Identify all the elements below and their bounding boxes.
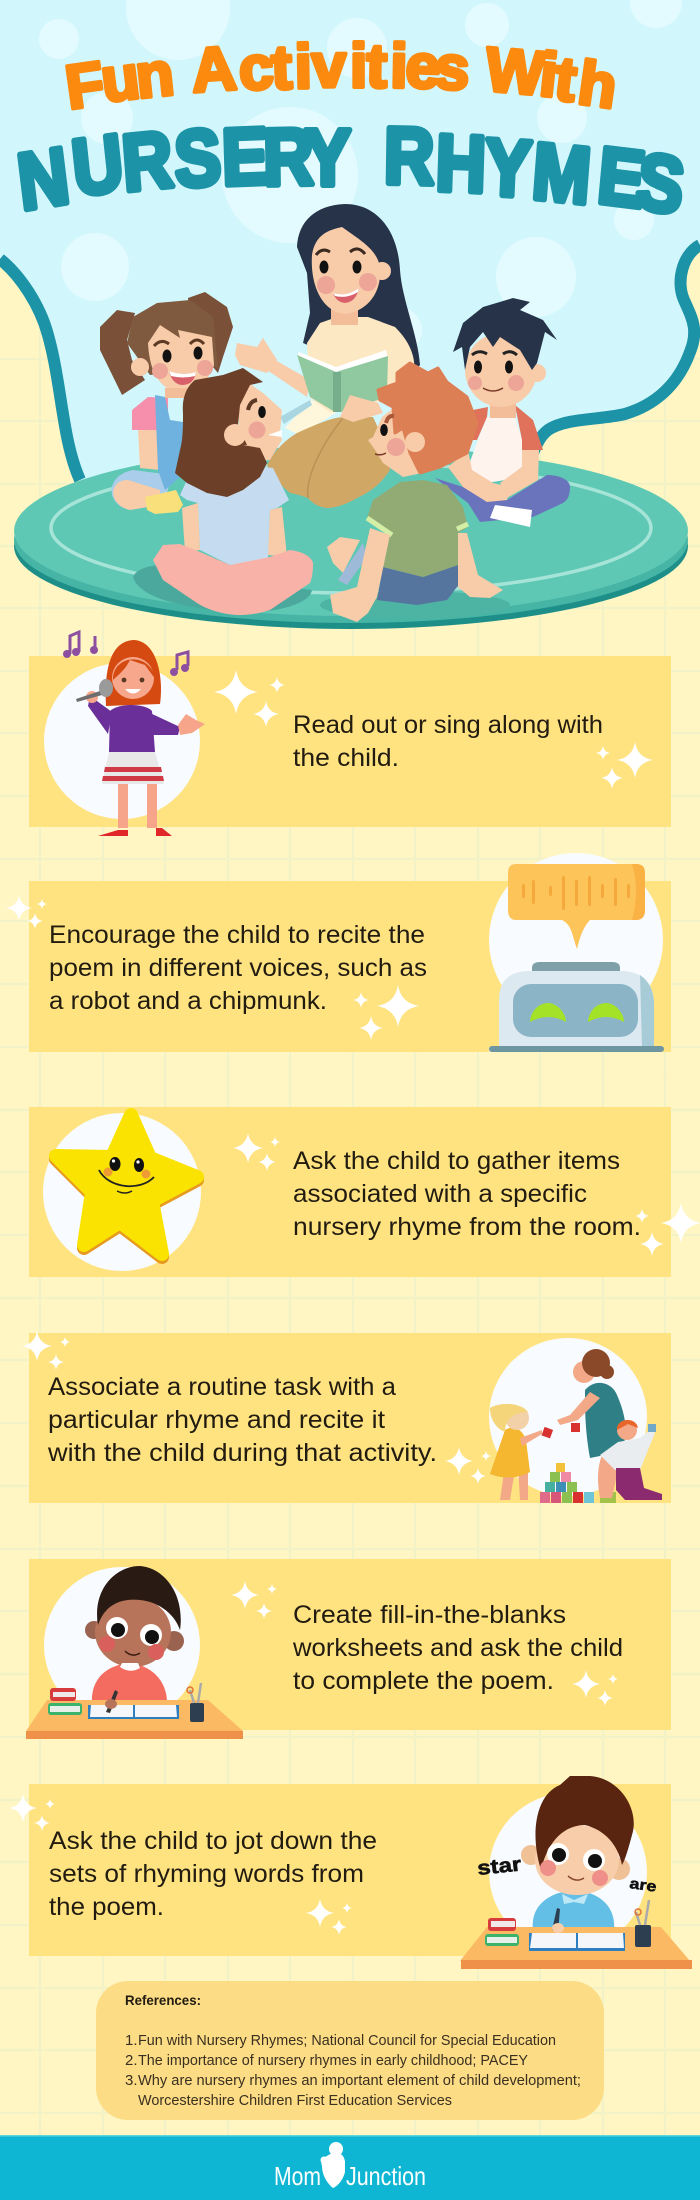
icon: smiling star: [56, 1115, 197, 1257]
icon: boy writing rhyming words at desk: [460, 1776, 692, 1969]
text: Read out or sing along with: [293, 711, 603, 739]
sparkles: [214, 670, 653, 789]
word: are: are: [628, 1875, 658, 1896]
sparkles: [231, 1581, 618, 1706]
panel 4: routine task: [22, 1331, 671, 1503]
panel 1: read or sing along: [29, 632, 671, 836]
sparkles: [233, 1133, 700, 1256]
text: with the child during that activity.: [47, 1439, 437, 1467]
panel 6: rhyming words: [9, 1776, 692, 1969]
text: to complete the poem.: [293, 1667, 554, 1695]
boy sitting in front: [327, 363, 503, 622]
teacher: [235, 204, 420, 508]
illustration: teacher reading to children on a rug: [14, 204, 688, 629]
title: Fun Activities With: Fun Activities With: [61, 31, 621, 123]
icon: mother and children stacking blocks: [490, 1349, 662, 1503]
text: poem in different voices, such as: [49, 954, 427, 982]
reference list: [125, 2032, 581, 2109]
logo: MomJunction: [274, 2142, 426, 2191]
icon: singing girl with microphone: [63, 632, 205, 836]
icon: robot with speech bubble: [489, 864, 664, 1052]
sparkles: [9, 1794, 352, 1935]
girl with pigtails: [100, 292, 233, 514]
text: [293, 1147, 641, 1241]
word: star: star: [476, 1853, 523, 1880]
reference list: 1.: [125, 2032, 138, 2049]
boy on right: [435, 298, 570, 527]
text: worksheets and ask the child: [292, 1634, 623, 1662]
panel 2: different voices: [6, 853, 680, 1075]
text: [47, 1373, 437, 1467]
references heading: References:: [125, 1992, 201, 2008]
references panel: [96, 1981, 604, 2120]
reference list: Why are nursery rhymes an important element of child development;: [138, 2072, 581, 2089]
text: nursery rhyme from the room.: [293, 1213, 641, 1241]
text: Ask the child to gather items: [293, 1147, 620, 1175]
text: the child.: [293, 744, 399, 772]
text: Create fill-in-the-blanks: [293, 1601, 566, 1629]
title: Nursery Rhymes: NURSERY RHYMES: [13, 110, 689, 231]
logo: MomJunction: Mom: [274, 2161, 321, 2191]
text: [293, 711, 603, 772]
text: [292, 1601, 623, 1695]
sparkles: [6, 895, 419, 1040]
logo: MomJunction: Junction: [346, 2161, 426, 2191]
text: [49, 921, 427, 1015]
text: the poem.: [49, 1893, 164, 1921]
reference list: Fun with Nursery Rhymes; National Council for Special Education: [138, 2032, 556, 2049]
panel 5: fill-in-the-blanks: [26, 1559, 671, 1739]
reference list: 3.: [125, 2072, 138, 2089]
rug: [14, 446, 688, 629]
text: sets of rhyming words from: [49, 1860, 364, 1888]
text: Encourage the child to recite the: [49, 921, 425, 949]
text: Ask the child to jot down the: [49, 1827, 377, 1855]
panel 3: gather items: [29, 1107, 700, 1277]
footer band: [0, 2135, 700, 2200]
text: a robot and a chipmunk.: [49, 987, 327, 1015]
text: Associate a routine task with a: [48, 1373, 396, 1401]
text: [49, 1827, 377, 1921]
header sky background with bubbles: [0, 0, 700, 480]
girl sitting in front: [153, 368, 313, 615]
reference list: The importance of nursery rhymes in early childhood; PACEY: [138, 2052, 528, 2069]
sparkles: [22, 1331, 491, 1484]
reference list: 2.: [125, 2052, 138, 2069]
reference list: Worcestershire Children First Education Services: [138, 2092, 452, 2109]
icon: boy writing at desk: [26, 1566, 243, 1739]
text: associated with a specific: [293, 1180, 587, 1208]
text: particular rhyme and recite it: [48, 1406, 385, 1434]
